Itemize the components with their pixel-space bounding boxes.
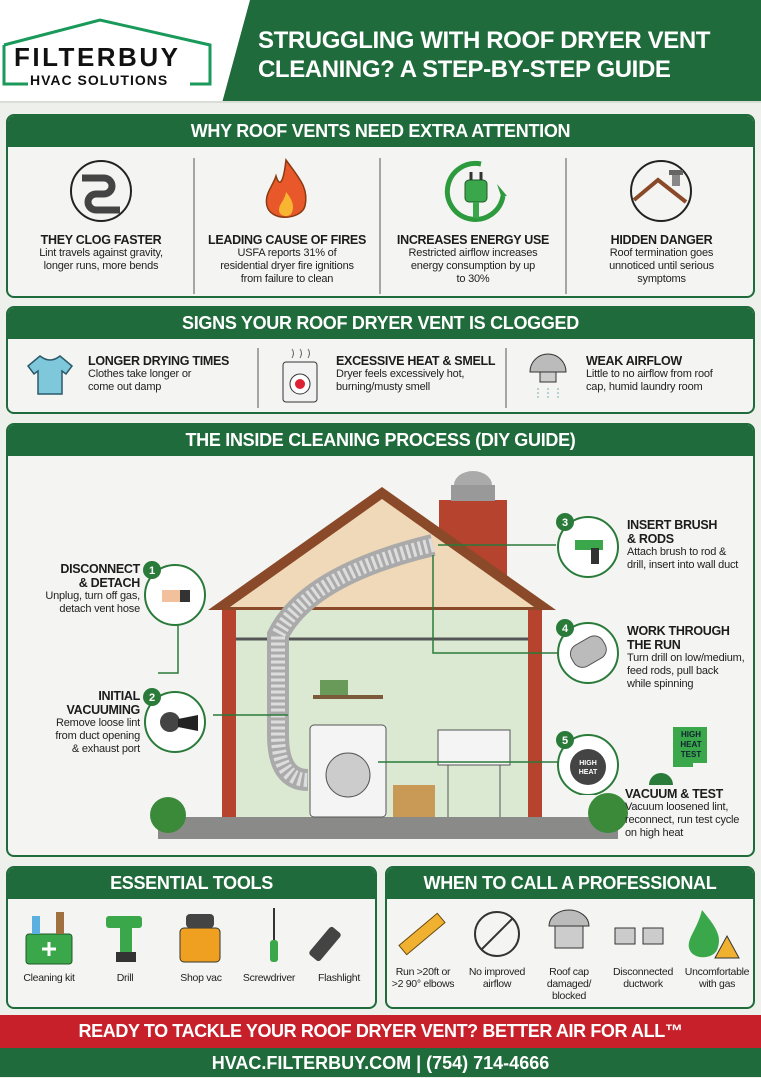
step 3: drill, insert into wall duct	[627, 559, 738, 571]
pro labels: >2 90° elbows	[392, 978, 454, 990]
text: fires	[208, 233, 366, 285]
step 4: while spinning	[627, 678, 693, 690]
panel: when to call a professional	[385, 866, 755, 1009]
text: weak airflow: Little to no airflow from roof	[586, 368, 713, 380]
panel: when to call a professional: airflow	[483, 978, 511, 990]
panel: when to call a professional: damaged/	[547, 978, 591, 990]
panel: essential tools: Flashlight	[318, 972, 360, 984]
panel: when to call a professional: Uncomfortable	[685, 966, 749, 978]
text: weak airflow: cap, humid laundry room	[586, 381, 702, 393]
step 3: Attach brush to rod &	[627, 546, 726, 558]
text: hidden: HIDDEN DANGER	[611, 233, 712, 247]
pro icons	[398, 910, 740, 958]
text: hidden: unnoticed until serious	[609, 260, 714, 272]
tool icons	[26, 908, 341, 964]
text: hidden: Roof termination goes	[610, 247, 713, 259]
text: excessive heat: EXCESSIVE HEAT & SMELL	[336, 354, 495, 368]
red banner	[0, 1015, 761, 1048]
logo: FILTERBUY	[14, 42, 180, 72]
step 4: feed rods, pull back	[627, 665, 718, 677]
step 4: Turn drill on low/medium,	[627, 652, 744, 664]
text: excessive heat: burning/musty smell	[336, 381, 430, 393]
step 3: 3	[562, 517, 568, 529]
step 1: Unplug, turn off gas,	[45, 590, 140, 602]
text: hidden	[609, 233, 714, 285]
text: fires: from failure to clean	[241, 273, 333, 285]
panel: inside cleaning process	[6, 423, 755, 857]
panel: when to call a professional: blocked	[552, 990, 586, 1002]
logo: HVAC SOLUTIONS	[30, 72, 168, 88]
panel: essential tools: Shop vac	[180, 972, 222, 984]
step 1: DISCONNECT	[60, 562, 140, 576]
step 4	[556, 619, 744, 690]
icon: shirt	[27, 355, 73, 395]
text: fires: residential dryer fire ignitions	[220, 260, 354, 272]
step 5: reconnect, run test cycle	[625, 814, 739, 826]
text: weak airflow: WEAK AIRFLOW	[586, 354, 682, 368]
text: fires: USFA reports 31% of	[238, 247, 336, 259]
icon: fire	[266, 158, 306, 218]
panel: inside cleaning process: THE INSIDE CLEANING PROCESS (DIY GUIDE)	[185, 430, 576, 450]
panel: why roof vents: WHY ROOF VENTS NEED EXTRA ATTENTION	[191, 121, 570, 141]
step 2	[55, 688, 206, 755]
panel: signs clogged	[6, 306, 755, 414]
panel: when to call a professional: Disconnected	[613, 966, 673, 978]
text: clog faster: Lint travels against gravity,	[39, 247, 163, 259]
step 1: detach vent hose	[59, 603, 140, 615]
step 2: INITIAL	[98, 689, 140, 703]
step 1: & DETACH	[79, 576, 140, 590]
panel: when to call a professional: WHEN TO CALL A PROFESSIONAL	[424, 873, 716, 893]
panel: when to call a professional: No improved	[469, 966, 525, 978]
text: excessive heat	[336, 354, 496, 393]
step 4: THE RUN	[627, 638, 680, 652]
panel: when to call a professional: with gas	[699, 978, 735, 990]
pro labels	[392, 966, 454, 990]
panel: essential tools: ESSENTIAL TOOLS	[110, 873, 273, 893]
step 5: on high heat	[625, 827, 683, 839]
panel: when to call a professional: ductwork	[623, 978, 663, 990]
step 2: from duct opening	[55, 730, 140, 742]
pro labels: Run >20ft or	[396, 966, 450, 978]
step 2: Remove loose lint	[56, 717, 140, 729]
step 5: 5	[562, 735, 568, 747]
step 5: HIGH HEAT TEST	[680, 730, 702, 759]
text: energy: Restricted airflow increases	[409, 247, 537, 259]
step 2: & exhaust port	[72, 743, 140, 755]
step 3: INSERT BRUSH	[627, 518, 717, 532]
step 3: & RODS	[627, 532, 674, 546]
text: longer drying	[88, 354, 229, 393]
step 2: VACUUMING	[67, 703, 140, 717]
footer	[0, 1048, 761, 1077]
step 4: 4	[562, 623, 569, 635]
text: energy: energy consumption by up	[411, 260, 535, 272]
panel: why roof vents	[6, 114, 755, 298]
step 5	[556, 727, 739, 839]
step 1	[45, 561, 206, 626]
text: fires: LEADING CAUSE OF FIRES	[208, 233, 366, 247]
icon: pipe	[70, 160, 132, 222]
step 4: WORK THROUGH	[627, 624, 730, 638]
step 5: HEAT	[579, 769, 598, 776]
text: longer drying: LONGER DRYING TIMES	[88, 354, 229, 368]
logo	[2, 18, 212, 88]
text: clog faster	[39, 233, 163, 272]
text: longer drying: Clothes take longer or	[88, 368, 191, 380]
text: excessive heat: Dryer feels excessively hot,	[336, 368, 464, 380]
panel: when to call a professional: Roof cap	[549, 966, 589, 978]
red banner: READY TO TACKLE YOUR ROOF DRYER VENT? BETTER AIR FOR ALL™	[79, 1021, 682, 1041]
header	[0, 0, 761, 103]
panel: essential tools: Drill	[117, 972, 133, 984]
panel: signs clogged: SIGNS YOUR ROOF DRYER VENT IS CLOGGED	[182, 313, 579, 333]
step 5: Vacuum loosened lint,	[625, 801, 728, 813]
title: STRUGGLING WITH ROOF DRYER VENT CLEANING? A STEP-BY-STEP GUIDE	[258, 27, 710, 83]
step 5: VACUUM & TEST	[625, 787, 723, 801]
text: clog faster: longer runs, more bends	[44, 260, 158, 272]
text: energy: to 30%	[456, 273, 490, 285]
icon: roof	[630, 160, 692, 222]
step 3	[556, 513, 738, 578]
text: energy	[397, 233, 549, 285]
footer: HVAC.FILTERBUY.COM | (754) 714-4666	[212, 1053, 549, 1073]
icon: energy	[444, 160, 507, 222]
tool labels: Cleaning kit	[23, 972, 75, 984]
text: energy: INCREASES ENERGY USE	[397, 233, 549, 247]
panel: essential tools: Screwdriver	[243, 972, 295, 984]
icon: roof cap	[530, 354, 566, 398]
text: longer drying: come out damp	[88, 381, 161, 393]
icon: dryer	[282, 348, 318, 402]
house illustration	[150, 471, 628, 839]
text: hidden: symptoms	[637, 273, 686, 285]
text: weak airflow	[586, 354, 713, 393]
panel: essential tools	[6, 866, 377, 1009]
text: clog faster: THEY CLOG FASTER	[41, 233, 161, 247]
step 1: 1	[149, 565, 155, 577]
step 5: HIGH	[579, 760, 597, 767]
step 2: 2	[149, 692, 155, 704]
